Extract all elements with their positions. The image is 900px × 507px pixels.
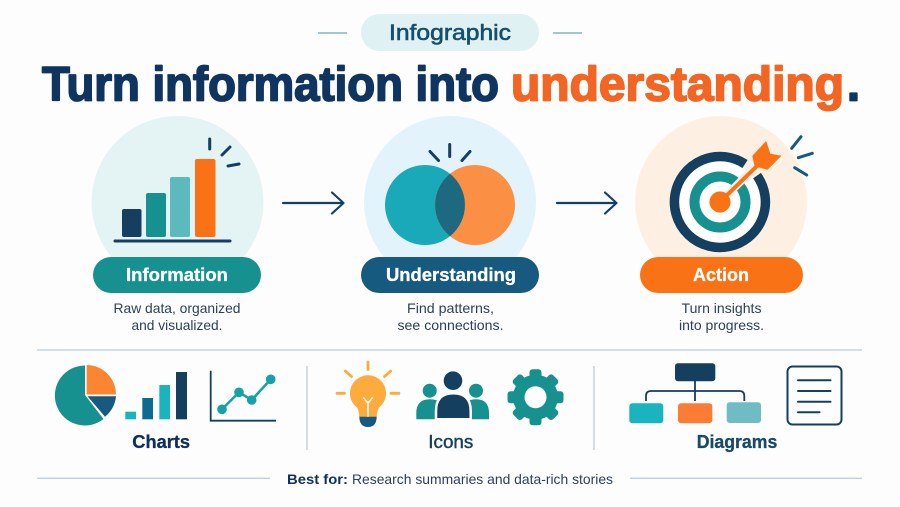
header tag: Infographic [389,20,511,45]
label pill: understanding [361,257,539,293]
icon: target with arrow [674,137,812,247]
panel: action [635,116,812,333]
icon: document [788,366,842,424]
title: . [847,58,860,112]
title: Turn information into [42,58,499,112]
footer note [37,471,862,487]
label pill: action: Action [693,265,749,285]
icon: light bulb [337,362,399,427]
label pill: information [93,257,261,293]
description: understanding [398,300,504,333]
section: charts [55,365,276,452]
description: information [114,300,240,333]
description: information: and visualized. [132,317,222,333]
label pill: action [640,257,803,293]
icon: gear [508,369,564,425]
description: understanding: Find patterns, [407,300,494,316]
heading: diagrams: Diagrams [697,432,777,452]
description: action [679,300,764,333]
footer note: Best for: [287,471,348,487]
icon: rising bar chart [115,139,239,241]
title [42,58,860,112]
label pill: understanding: Understanding [386,265,516,285]
title: understanding [511,58,844,112]
icon: small bar chart [125,372,187,419]
description: information: Raw data, organized [114,300,240,316]
icon: people group [416,371,489,419]
description: action: Turn insights [682,300,762,316]
header tag [318,14,582,51]
heading: charts: Charts [132,432,190,452]
description: action: into progress. [679,317,764,333]
icon: pie chart [55,365,116,425]
arrow: understanding to action [557,192,616,214]
section: diagrams [629,363,842,452]
panel: understanding [361,116,539,333]
footer note: Research summaries and data-rich stories [352,471,613,487]
section: icons [337,362,564,452]
heading: icons: Icons [428,432,473,452]
description: understanding: see connections. [398,317,504,333]
icon: venn diagram [385,144,515,245]
icon: org diagram [629,363,761,423]
arrow: information to understanding [283,192,344,214]
label pill: information: Information [126,265,228,285]
icon: line chart [211,371,276,421]
panel: information [92,116,264,333]
